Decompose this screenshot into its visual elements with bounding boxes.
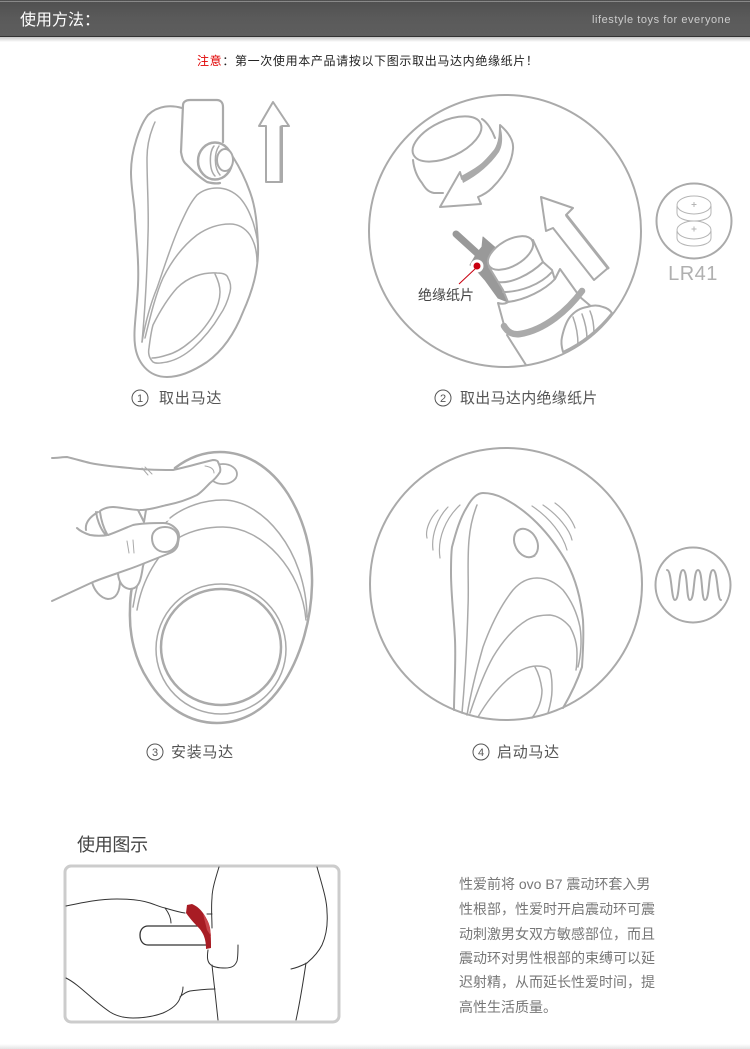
motor cylinder xyxy=(482,229,593,365)
usage description: 震动环对男性根部的束缚可以延 xyxy=(459,950,655,966)
wave xyxy=(667,570,721,600)
vibration badge xyxy=(656,548,730,622)
usage description: 性根部，性爱时开启震动环可震 xyxy=(459,901,655,917)
step 1 illustration: remove motor xyxy=(131,100,289,377)
callout: insulating paper xyxy=(418,260,484,303)
battery label: LR41 xyxy=(668,263,718,285)
step 4 caption: 4 xyxy=(478,747,484,759)
step 1 caption: 1 xyxy=(137,393,143,405)
ring xyxy=(156,584,286,714)
big circle xyxy=(369,95,641,367)
up arrow xyxy=(259,102,289,182)
device body xyxy=(451,493,583,710)
usage description: 迟射精，从而延长性爱时间，提 xyxy=(459,974,655,990)
motor xyxy=(181,100,223,183)
thumb xyxy=(52,523,179,601)
usage heading: 使用图示 xyxy=(77,835,148,855)
big circle xyxy=(370,448,642,720)
button xyxy=(209,464,237,484)
usage description: 高性生活质量。 xyxy=(459,999,557,1015)
step 3 caption: 安装马达 xyxy=(171,744,234,761)
back finger xyxy=(85,505,170,538)
twist knob xyxy=(406,107,488,171)
battery badge xyxy=(656,184,732,285)
motor lower body xyxy=(498,269,593,365)
button xyxy=(509,525,543,561)
ribbed end xyxy=(561,306,612,352)
usage diagram panel xyxy=(65,866,339,1022)
female figure xyxy=(212,867,327,1020)
step 2 illustration: remove insulating paper xyxy=(369,95,641,367)
header title: 使用方法： xyxy=(20,11,100,29)
notice line: 注意：第一次使用本产品请按以下图示取出马达内绝缘纸片！ xyxy=(197,53,539,68)
up-left arrow xyxy=(541,197,608,280)
header tagline: lifestyle toys for everyone xyxy=(592,14,731,26)
collar band xyxy=(504,291,582,334)
callout: insulating paper: 绝缘纸片 xyxy=(418,287,474,303)
step 4 illustration: start motor xyxy=(370,448,642,720)
device body xyxy=(130,452,312,723)
step 2 caption: 取出马达内绝缘纸片 xyxy=(460,390,598,407)
panel frame xyxy=(65,866,339,1022)
lower fingers xyxy=(92,580,120,599)
header bar xyxy=(0,0,750,42)
vibrating ring xyxy=(186,904,211,949)
step 1 caption: 取出马达 xyxy=(159,390,222,407)
usage description: 动刺激男女双方敏感部位，而且 xyxy=(459,926,655,942)
step 3 caption: 3 xyxy=(152,747,158,759)
insulating paper xyxy=(456,234,478,254)
motor button xyxy=(198,142,232,180)
device body xyxy=(131,106,258,377)
usage description xyxy=(459,876,655,1015)
battery 2 xyxy=(677,221,711,246)
usage description: 性爱前将 ovo B7 震动环套入男 xyxy=(459,876,650,892)
male figure xyxy=(66,899,215,1018)
vibration marks xyxy=(427,505,460,558)
step 2 caption: 2 xyxy=(440,393,446,405)
twist arrow xyxy=(440,125,513,207)
battery 1 xyxy=(677,196,711,221)
step 4 caption: 启动马达 xyxy=(497,744,560,761)
index finger xyxy=(52,457,220,510)
step 3 illustration: install motor xyxy=(52,452,312,723)
